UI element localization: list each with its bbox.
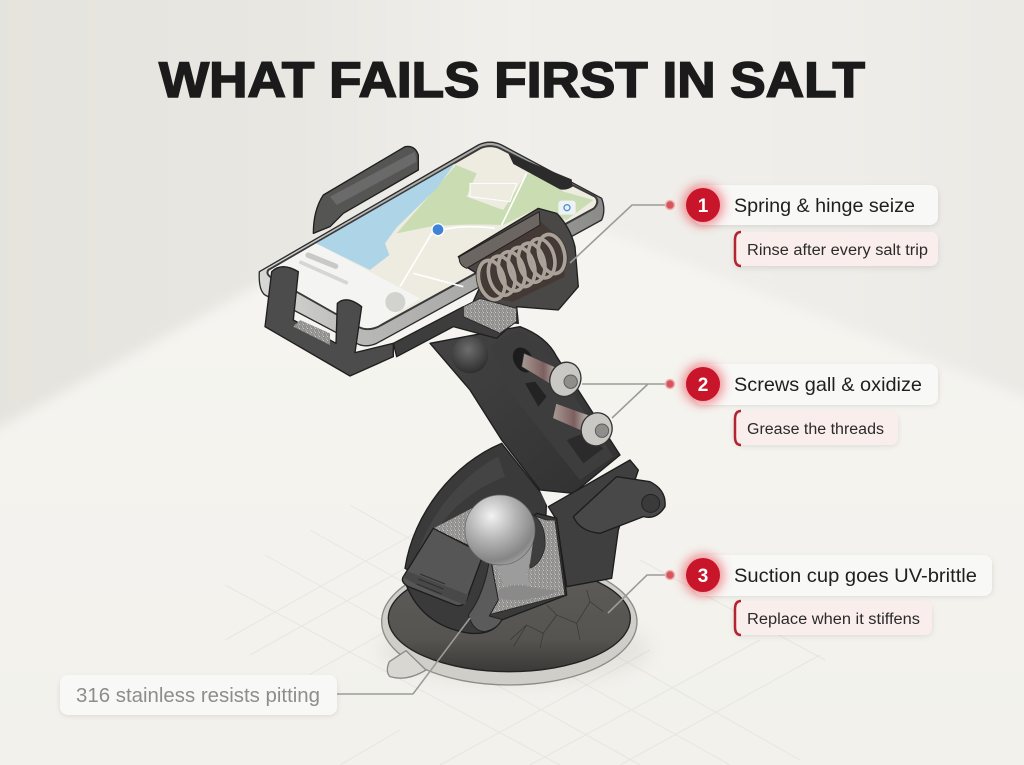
phone holder — [259, 142, 604, 376]
map: compass button — [558, 201, 576, 215]
callout 1: spring and hinge: 1 — [698, 196, 709, 217]
map: water — [316, 163, 455, 270]
phone screen — [267, 146, 597, 329]
callout: stainless note — [60, 675, 337, 716]
leader dot 3 — [666, 570, 674, 580]
leader line for stainless note — [337, 618, 470, 694]
leader line 2 — [582, 384, 666, 418]
suction cup with cracks — [388, 565, 630, 672]
mount arm and suction base — [382, 327, 665, 685]
callout 1: spring and hinge — [666, 184, 938, 268]
rear dome — [405, 443, 547, 587]
screw 2 — [553, 403, 617, 450]
leader dot 2 — [666, 380, 674, 388]
phone body — [259, 142, 604, 346]
callout 2: screws — [666, 363, 938, 446]
spring clamp housing — [458, 208, 578, 323]
leader line 1 — [570, 205, 666, 263]
map: green park — [397, 165, 593, 233]
callout 3: suction cup — [666, 554, 992, 636]
upper arm — [430, 327, 620, 493]
gap behind tower — [540, 491, 555, 506]
map: white info panel — [269, 243, 420, 328]
callout 3: suction cup: Suction cup goes UV-brittle — [734, 565, 977, 587]
title: WHAT FAILS FIRST IN SALT — [159, 52, 865, 108]
leader line 3 — [608, 575, 666, 613]
stainless steel ball — [465, 495, 560, 600]
map: location dot — [431, 223, 445, 236]
rear grip — [313, 146, 418, 233]
shadow under mount — [380, 616, 650, 684]
corroded spring — [474, 231, 569, 303]
front grips — [265, 267, 393, 376]
callout 1: spring and hinge: Rinse after every salt trip — [747, 242, 928, 259]
screw 1 — [509, 344, 586, 401]
salt-crusted ledge — [463, 298, 517, 333]
lever handle — [573, 477, 665, 533]
phone notch — [508, 153, 573, 190]
salt-filled cutaway — [468, 513, 565, 632]
callout 2: screws: 2 — [698, 375, 708, 396]
ball joint — [452, 337, 488, 373]
illustration: phone car mount — [259, 142, 665, 685]
right tower — [548, 460, 638, 587]
callout 3: suction cup: Replace when it stiffens — [747, 611, 920, 628]
callout: stainless note: 316 stainless resists pitting — [76, 685, 320, 707]
suction plate — [382, 558, 637, 685]
callout 2: screws: Screws gall & oxidize — [734, 374, 922, 396]
housing bowl — [403, 513, 567, 633]
callout 2: screws: Grease the threads — [747, 421, 884, 438]
callout 3: suction cup: 3 — [698, 566, 708, 587]
lower-left lever pad — [402, 507, 483, 606]
mount bracket under phone — [393, 307, 517, 357]
leader dot 1 — [666, 200, 674, 210]
callout 1: spring and hinge: Spring & hinge seize — [734, 195, 915, 217]
